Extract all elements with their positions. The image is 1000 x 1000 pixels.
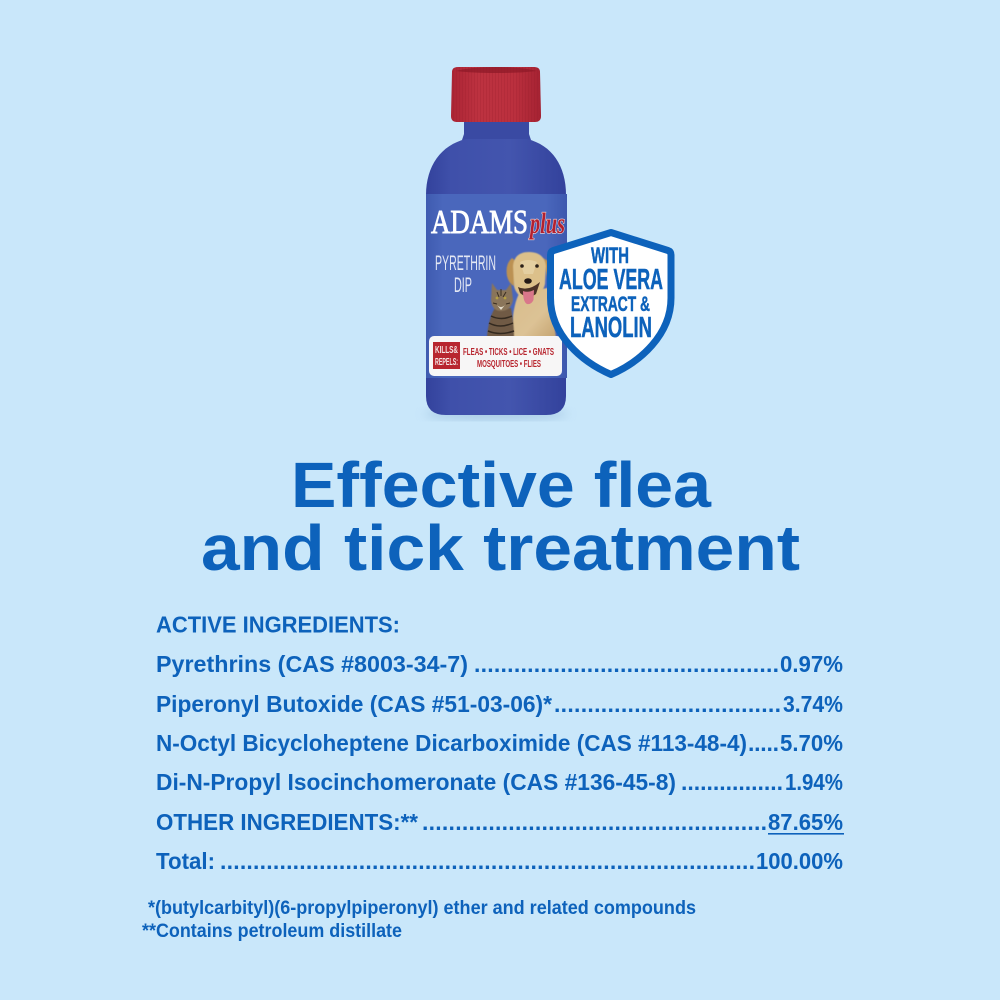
pest list — [463, 347, 554, 370]
row: n-octyl bicycloheptene dicarboximide: N-Octyl Bicycloheptene Dicarboximide (CAS #113-48-4) — [156, 730, 747, 756]
ingredients table — [156, 612, 844, 874]
dog photo — [507, 252, 556, 337]
pest list: FLEAS • TICKS • LICE • GNATS — [463, 347, 554, 358]
cat photo — [487, 283, 514, 337]
row: pyrethrins: 0.97% — [780, 651, 843, 677]
bottle body — [426, 139, 566, 415]
row: pyrethrins: Pyrethrins (CAS #8003-34-7) — [156, 651, 468, 677]
pest list: MOSQUITOES • FLIES — [477, 359, 541, 370]
product name: PYRETHRIN — [435, 252, 496, 275]
footnotes — [142, 898, 696, 942]
row: total: 100.00% — [756, 848, 843, 874]
bottle cap — [451, 67, 541, 122]
row: di-n-propyl isocinchomeronate: Di-N-Propyl Isocinchomeronate (CAS #136-45-8) — [156, 769, 676, 795]
red badge: KILLS& — [435, 345, 458, 356]
row: di-n-propyl isocinchomeronate: 1.94% — [785, 769, 843, 795]
active ingredients heading: ACTIVE INGREDIENTS: — [156, 612, 400, 638]
shield badge: EXTRACT & — [571, 293, 650, 316]
product name: DIP — [454, 274, 472, 297]
row: total: ................................................................................. — [220, 848, 755, 874]
row: piperonyl butoxide: Piperonyl Butoxide (CAS #51-03-06)* — [156, 691, 552, 717]
row: piperonyl butoxide — [156, 691, 843, 717]
product name — [435, 252, 496, 297]
bottle neck — [462, 118, 531, 140]
shield badge — [550, 232, 671, 374]
row: other ingredients: OTHER INGREDIENTS:** — [156, 809, 418, 835]
row: other ingredients — [156, 809, 844, 835]
row: piperonyl butoxide: 3.74% — [783, 691, 843, 717]
row: n-octyl bicycloheptene dicarboximide: 5.70% — [780, 730, 843, 756]
footnotes: **Contains petroleum distillate — [142, 921, 402, 942]
headline — [201, 449, 800, 584]
red badge: REPELS: — [435, 357, 458, 368]
footnotes: *(butylcarbityl)(6-propylpiperonyl) ether and related compounds — [148, 898, 696, 919]
row: other ingredients: .................................................... — [422, 809, 767, 835]
row: pyrethrins — [156, 651, 843, 677]
shield badge: WITH — [591, 243, 629, 268]
row: piperonyl butoxide: .................................. — [554, 691, 781, 717]
row: di-n-propyl isocinchomeronate: ................ — [681, 769, 783, 795]
row: other ingredients: 87.65% — [768, 809, 843, 835]
brand logo: ADAMS — [431, 204, 528, 241]
row: total: Total: — [156, 848, 215, 874]
brand logo: plus — [528, 207, 565, 240]
headline: Effective flea — [291, 449, 711, 521]
row: pyrethrins: .............................................. — [474, 651, 779, 677]
white claims strip — [429, 336, 562, 376]
shield badge: ALOE VERA — [559, 264, 663, 296]
headline: and tick treatment — [201, 512, 800, 584]
red badge — [433, 342, 460, 369]
row: n-octyl bicycloheptene dicarboximide: ..... — [748, 730, 779, 756]
bottle label — [426, 194, 567, 378]
product bottle — [424, 67, 568, 420]
shield badge: LANOLIN — [570, 312, 652, 344]
